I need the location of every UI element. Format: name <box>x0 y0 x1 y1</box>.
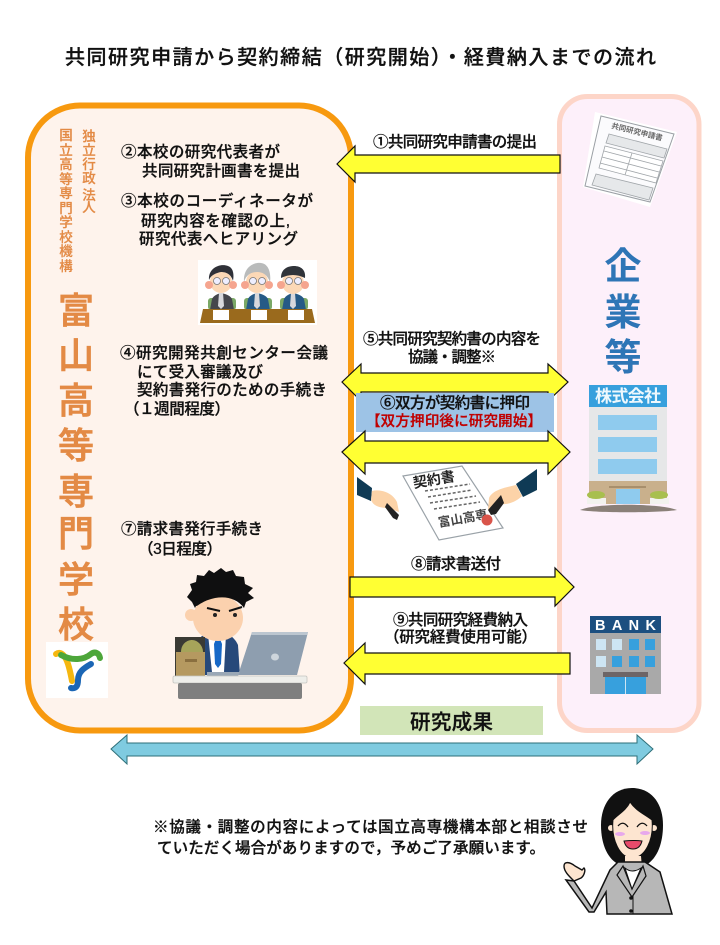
illustration: contract and hands: 富山高専 <box>437 506 489 530</box>
illustration: three reviewers <box>198 260 317 325</box>
illustration: application form: 共同研究申請書 <box>611 120 664 143</box>
step 7 text: ⑦請求書発行手続き <box>121 520 263 538</box>
footnote <box>153 818 588 857</box>
step 6 box <box>356 393 554 432</box>
step 2 text: ②本校の研究代表者が <box>121 142 280 161</box>
organisation label: column 1: 校 <box>59 230 73 245</box>
organisation label: column 2: 立 <box>82 143 96 158</box>
illustration: contract and hands <box>357 466 537 540</box>
organisation label: column 2: 法 <box>82 188 96 203</box>
college name: 学 <box>58 559 94 600</box>
result box <box>360 706 543 735</box>
illustration: staff at laptop <box>173 568 308 699</box>
step 2 text: 共同研究計画書を提出 <box>142 162 300 180</box>
college name <box>58 290 94 645</box>
heading: companies: 企 <box>604 246 642 287</box>
step 7 text <box>121 520 263 558</box>
step 4 text: （１週間程度） <box>124 400 230 418</box>
illustration: bank: BANK <box>595 618 657 634</box>
arrow 6: sealing <box>342 431 570 474</box>
college name: 高 <box>58 380 94 421</box>
illustration: woman presenting <box>564 788 672 914</box>
college name: 山 <box>58 335 94 376</box>
organisation label: column 1: 立 <box>59 143 73 158</box>
organisation label: column 1: 学 <box>59 215 73 230</box>
step 3 text: 研究内容を確認の上, <box>141 212 290 230</box>
organisation label: column 1: 国 <box>59 128 73 143</box>
college name: 専 <box>58 471 94 512</box>
icon: college logo <box>46 642 108 698</box>
panel: Toyama college <box>28 106 351 730</box>
step 6 box: ⑥双方が契約書に押印 <box>380 393 530 412</box>
organisation label: column 1: 構 <box>59 259 73 274</box>
arrow 9: payment: （研究経費使用可能） <box>384 628 537 646</box>
arrow 5: discussion: 協議・調整※ <box>408 348 496 366</box>
heading: companies: 等 <box>604 337 642 378</box>
organisation label: column 1: 門 <box>59 201 73 216</box>
organisation label: column 1 <box>59 128 73 274</box>
double arrow: research results <box>111 735 653 764</box>
step 4 text: 契約書発行のための手続き <box>137 381 327 399</box>
illustration: company building: 株式会社 <box>595 387 661 406</box>
college name: 校 <box>58 604 94 645</box>
arrow 9: payment: ⑨共同研究経費納入 <box>393 611 528 629</box>
arrow 9: payment <box>344 611 570 684</box>
organisation label: column 2 <box>82 129 96 215</box>
step 2 text <box>121 142 300 180</box>
organisation label: column 1: 機 <box>59 244 73 259</box>
arrow 8: invoice: ⑧請求書送付 <box>411 555 501 573</box>
step 6 box: 【双方押印後に研究開始】 <box>366 413 542 430</box>
illustration: application form <box>583 112 677 207</box>
organisation label: column 2: 人 <box>82 200 96 215</box>
organisation label: column 1: 等 <box>59 171 73 187</box>
college name: 門 <box>58 513 94 554</box>
illustration: company building <box>580 385 677 512</box>
panel: companies <box>560 96 699 730</box>
arrow 5: discussion <box>342 330 568 401</box>
step 3 text <box>121 191 313 248</box>
footnote: ※協議・調整の内容によっては国立高専機構本部と相談させ <box>153 818 588 836</box>
step 4 text: ④研究開発共創センター会議 <box>120 344 328 362</box>
step 4 text: にて受入審議及び <box>137 362 263 381</box>
illustration: contract and hands: 契約書 <box>412 468 456 491</box>
organisation label: column 2: 独 <box>82 129 96 144</box>
step 7 text: （3日程度） <box>138 540 222 558</box>
footnote: ていただく場合がありますので，予めご了承願います。 <box>157 838 545 857</box>
college name: 等 <box>58 425 94 466</box>
organisation label: column 2: 政 <box>82 171 96 186</box>
arrow 1: application: ①共同研究申請書の提出 <box>373 133 537 151</box>
title: 共同研究申請から契約締結（研究開始）・経費納入までの流れ <box>65 46 656 69</box>
step 4 text <box>120 344 328 418</box>
organisation label: column 1: 専 <box>59 186 73 201</box>
college name: 富 <box>58 290 94 331</box>
organisation label: column 1: 高 <box>59 156 73 172</box>
result box: 研究成果 <box>410 711 493 734</box>
heading: companies <box>604 246 642 378</box>
step 3 text: ③本校のコーディネータが <box>121 191 313 210</box>
arrow 8: invoice <box>350 555 574 606</box>
step 3 text: 研究代表へヒアリング <box>139 230 298 248</box>
organisation label: column 2: 行 <box>82 157 96 172</box>
illustration: bank <box>590 616 661 694</box>
arrow 1: application <box>337 133 560 182</box>
heading: companies: 業 <box>604 292 642 333</box>
arrow 5: discussion: ⑤共同研究契約書の内容を <box>363 330 541 348</box>
